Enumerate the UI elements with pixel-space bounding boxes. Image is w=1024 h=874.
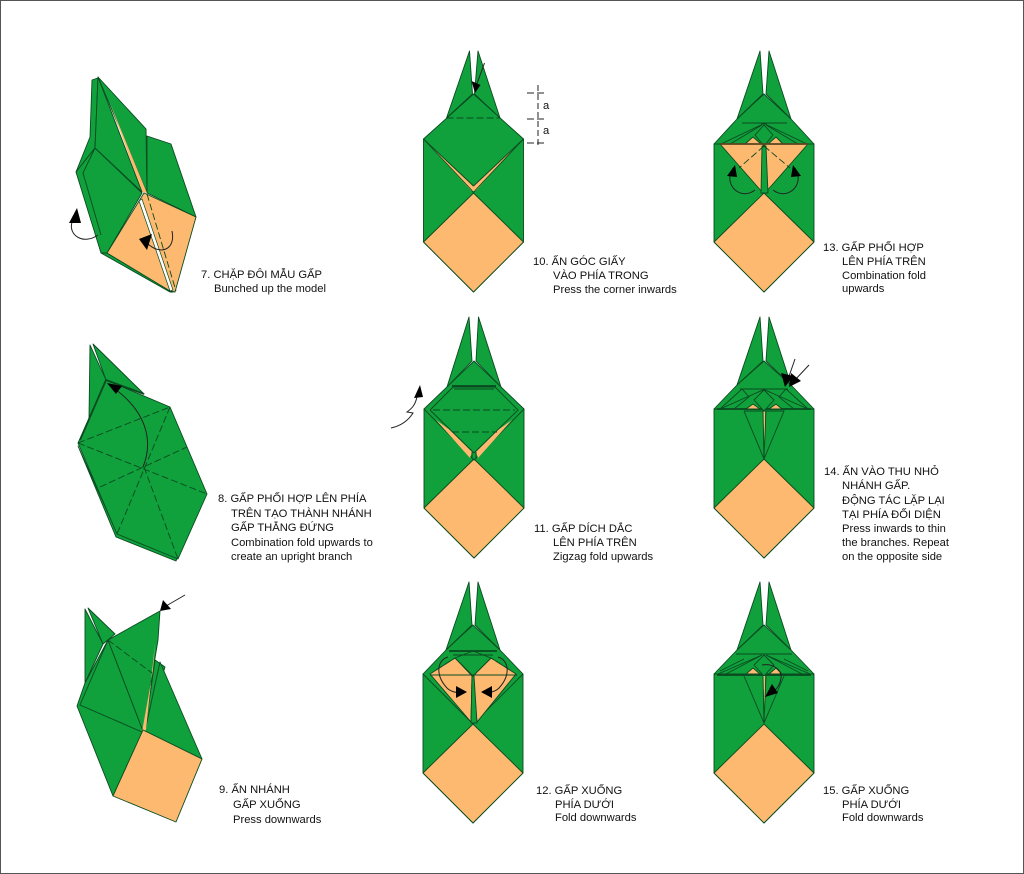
step 12 label: 12. GẤP XUỐNG <box>536 783 622 797</box>
step 7 diagram <box>69 77 196 292</box>
step 7 label <box>201 268 326 295</box>
step 9 label: GẤP XUỐNG <box>233 797 301 811</box>
step 15 label: PHÍA DƯỚI <box>842 798 901 811</box>
step 15 label <box>823 783 924 824</box>
step 13 label: 13. GẤP PHỐI HỢP <box>823 240 924 254</box>
fold measure marks: a <box>543 100 550 112</box>
step 8 label: create an upright branch <box>231 551 352 563</box>
step 13 diagram <box>714 51 814 292</box>
step 11 diagram <box>424 317 524 558</box>
step 15 label: Fold downwards <box>842 812 924 824</box>
step 13 label: upwards <box>842 283 885 295</box>
step 11 label: Zigzag fold upwards <box>553 551 654 563</box>
step 10 label: Press the corner inwards <box>553 284 677 296</box>
step 10 label: VÀO PHÍA TRONG <box>553 269 649 282</box>
step 12 label: Fold downwards <box>555 812 637 824</box>
step 14 label: on the opposite side <box>842 551 942 563</box>
step 10 label <box>533 255 677 296</box>
step 13 label: Combination fold <box>842 270 926 282</box>
step 14 label: Press inwards to thin <box>842 523 946 535</box>
step 12 label <box>536 783 637 824</box>
step 8 diagram <box>78 344 207 561</box>
step 10 label: 10. ẤN GÓC GIẤY <box>533 255 626 268</box>
step 14 label: 14. ẤN VÀO THU NHỎ <box>824 465 939 478</box>
step 14 label: the branches. Repeat <box>842 537 950 549</box>
step 8 label <box>218 491 373 563</box>
step 14 label: NHÁNH GẤP. <box>842 479 910 492</box>
step 9 label: 9. ẤN NHÁNH <box>219 783 290 796</box>
step 13 label: LÊN PHÍA TRÊN <box>842 255 926 268</box>
step 14 label <box>824 465 950 563</box>
step 9 label <box>219 783 322 826</box>
step 14 diagram <box>714 317 814 558</box>
step 12 diagram <box>423 582 523 823</box>
step 13 label <box>823 240 926 295</box>
fold measure marks <box>527 85 550 147</box>
step 11 label <box>534 522 654 563</box>
step 15 label: 15. GẤP XUỐNG <box>823 783 909 797</box>
step 8 label: GẤP THẲNG ĐỨNG <box>231 521 334 534</box>
step 8 label: Combination fold upwards to <box>231 537 373 549</box>
step 8 label: TRÊN TẠO THÀNH NHÁNH <box>231 507 372 520</box>
step 15 diagram <box>714 582 814 823</box>
fold measure marks: a <box>543 125 550 137</box>
step 8 label: 8. GẤP PHỐI HỢP LÊN PHÍA <box>218 491 367 505</box>
step 11 label: 11. GẤP DÍCH DẮC <box>534 522 632 535</box>
step 10 diagram <box>424 51 524 292</box>
zigzag arrow <box>391 385 423 428</box>
step 7 label: Bunched up the model <box>214 283 326 295</box>
step 9 label: Press downwards <box>233 814 322 826</box>
step 14 label: TẠI PHÍA ĐỐI DIỆN <box>842 507 941 521</box>
step 14 label: ĐỘNG TÁC LẶP LẠI <box>842 494 945 507</box>
step 7 label: 7. CHẶP ĐÔI MẪU GẤP <box>201 268 322 281</box>
step 11 label: LÊN PHÍA TRÊN <box>553 536 637 549</box>
step 12 label: PHÍA DƯỚI <box>555 798 614 811</box>
step 9 diagram <box>77 595 202 822</box>
